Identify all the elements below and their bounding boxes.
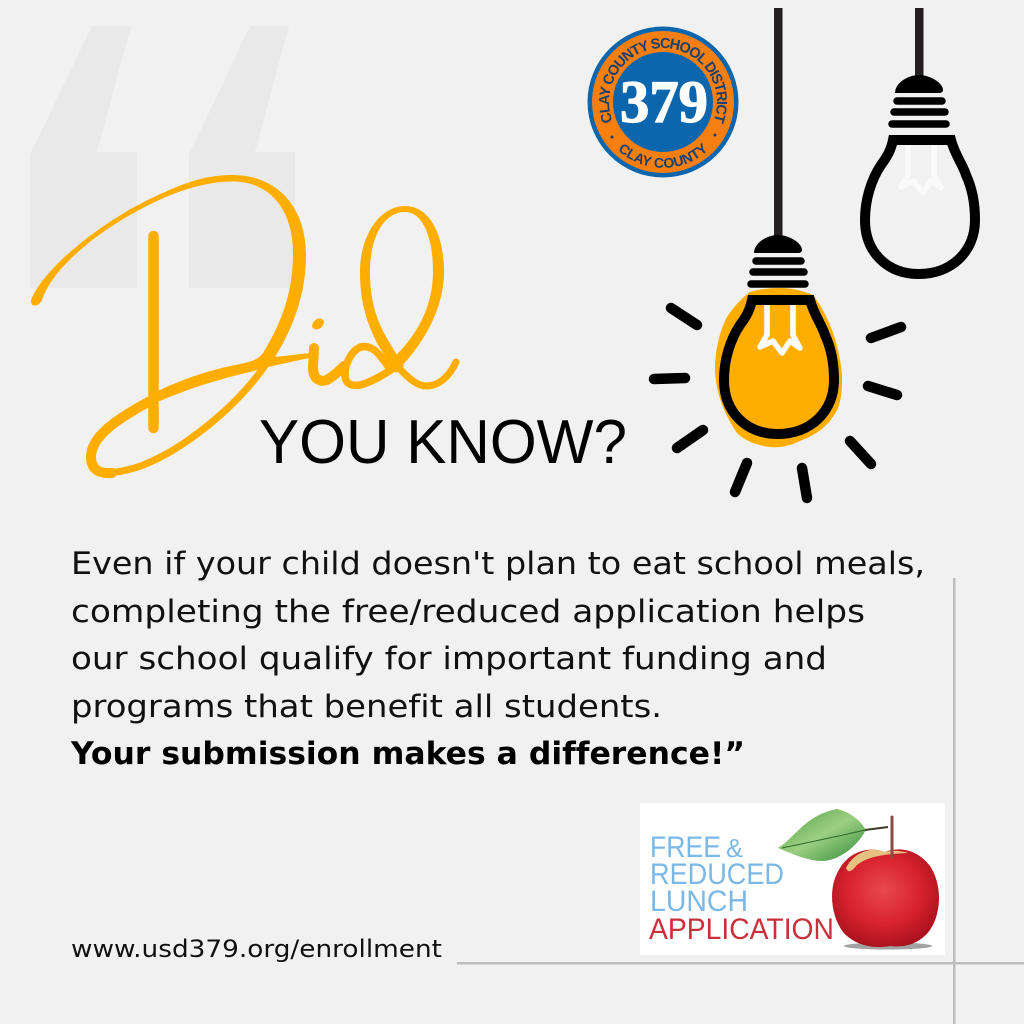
yellow glow blob — [715, 288, 842, 447]
application title text: LUNCH — [650, 885, 748, 918]
body paragraph: completing the free/reduced application helps — [71, 594, 865, 630]
leaf — [778, 809, 888, 861]
website address: www.usd379.org/enrollment — [71, 935, 442, 963]
script heading: Did — [31, 175, 456, 473]
lit hanging light bulb — [654, 8, 901, 498]
heading: YOU KNOW?: YOU KNOW? — [259, 408, 627, 477]
filament — [760, 304, 800, 353]
free and reduced lunch application image — [640, 803, 945, 955]
body paragraph: Even if your child doesn't plan to eat school meals, — [71, 546, 925, 582]
body paragraph — [70, 546, 925, 772]
application title text: & — [726, 833, 743, 863]
school district logo — [588, 26, 738, 178]
application title text: REDUCED — [650, 858, 784, 891]
body paragraph: programs that benefit all students. — [71, 689, 662, 725]
school district logo: CLAY COUNTY — [620, 142, 706, 168]
light rays — [654, 308, 901, 498]
apple shadow — [844, 942, 932, 950]
unlit hanging light bulb — [865, 8, 975, 274]
application title text — [649, 831, 834, 946]
body paragraph: our school qualify for important funding and — [71, 641, 827, 677]
corner frame lines — [457, 578, 1024, 1024]
application title text: APPLICATION — [649, 913, 834, 946]
school district logo: CLAY COUNTY SCHOOL DISTRICT — [599, 38, 727, 124]
bold closing statement: Your submission makes a difference!” — [70, 736, 745, 772]
bulb socket — [751, 235, 805, 284]
decorative quotation mark — [30, 26, 295, 288]
school district logo: 379 — [620, 69, 708, 135]
bulb outline — [724, 300, 834, 434]
apple — [832, 817, 939, 947]
application title text: FREE — [650, 831, 721, 864]
